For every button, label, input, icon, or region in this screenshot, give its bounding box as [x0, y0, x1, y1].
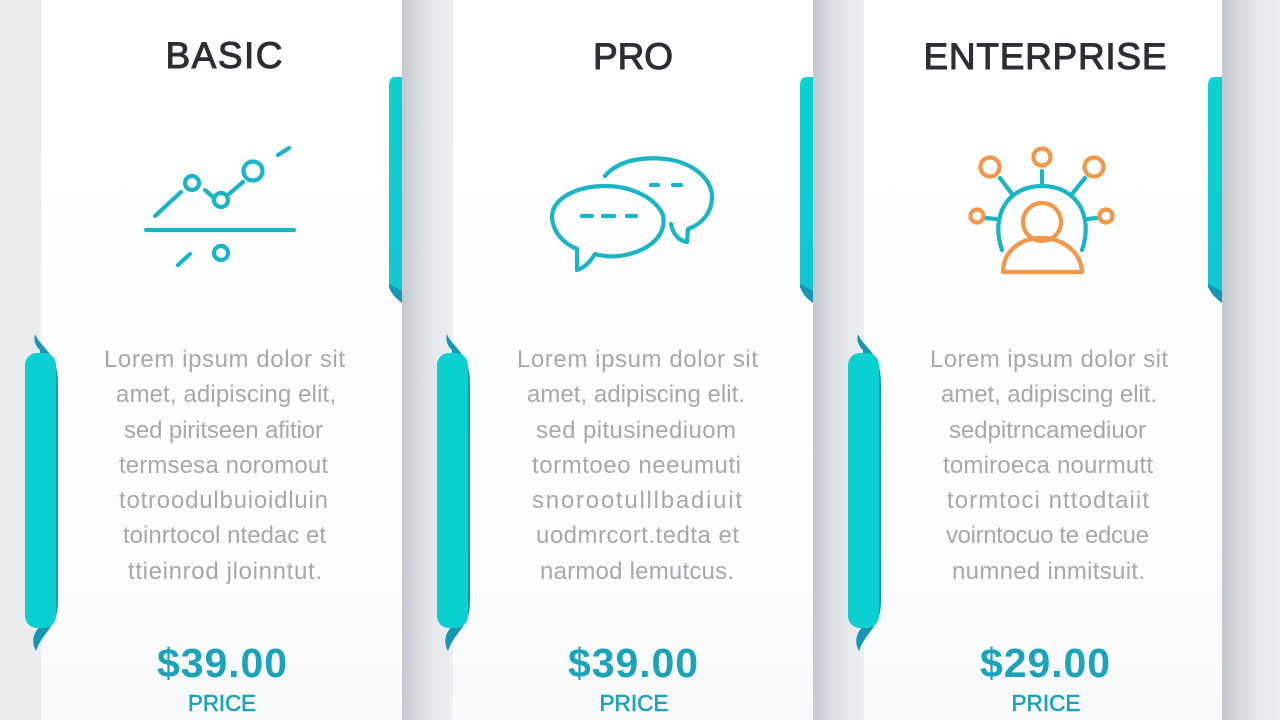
text block: basic description: Lorem ipsum dolor sit: [104, 346, 345, 373]
text block: pro description: narmod lemutcus.: [540, 558, 734, 585]
heading: enterprise: ENTERPRISE: [924, 36, 1166, 77]
text block: enterprise description: numned inmitsuit.: [952, 558, 1145, 585]
text block: enterprise description: sedpitrncamediuor: [949, 417, 1146, 444]
tab: pro right: [800, 77, 813, 303]
icon: user network: [970, 148, 1112, 272]
text block: basic description: totroodulbuioidluin: [119, 487, 328, 514]
heading: pro: PRO: [593, 36, 673, 77]
panel: basic: [41, 0, 402, 720]
text block: basic description: toinrtocol ntedac et: [123, 522, 326, 549]
text block: pro description: sed pitusinediuom: [536, 417, 736, 444]
icon: line chart: [146, 148, 294, 265]
icon: chat bubbles: [552, 158, 712, 270]
price label: pro: PRICE: [600, 690, 668, 716]
price label: enterprise: PRICE: [1012, 690, 1080, 716]
tab: pro left: [437, 334, 470, 651]
tab: enterprise left: [848, 334, 881, 651]
tab: enterprise right: [1208, 77, 1222, 303]
text block: basic description: termsesa noromout: [119, 452, 328, 479]
text block: pro description: tormtoeo neeumuti: [532, 452, 741, 479]
price: pro: $39.00: [568, 640, 698, 686]
text block: basic description: amet, adipiscing elit,: [116, 381, 336, 408]
text block: enterprise description: amet, adipiscing elit.: [941, 381, 1157, 408]
text block: enterprise description: tomiroeca nourmutt: [943, 452, 1153, 479]
text block: basic description: ttieinrod jloinntut.: [128, 558, 322, 585]
price: basic: $39.00: [157, 640, 287, 686]
text block: enterprise description: voirntocuo te edcue: [946, 522, 1149, 549]
text block: enterprise description: tormtoci nttodtaiit: [947, 487, 1149, 514]
panel: enterprise: [864, 0, 1222, 720]
text block: enterprise description: Lorem ipsum dolor sit: [930, 346, 1168, 373]
text block: pro description: uodmrcort.tedta et: [536, 522, 739, 549]
text block: pro description: Lorem ipsum dolor sit: [517, 346, 758, 373]
text block: pro description: amet, adipiscing elit.: [527, 381, 745, 408]
price label: basic: PRICE: [188, 690, 256, 716]
text block: basic description: [104, 346, 345, 585]
tab: basic right: [389, 77, 402, 303]
panel: pro: [453, 0, 813, 720]
text block: enterprise description: [930, 346, 1168, 585]
tab: basic left: [25, 334, 58, 651]
price: enterprise: $29.00: [980, 640, 1110, 686]
text block: basic description: sed piritseen afitior: [124, 417, 323, 444]
heading: basic: BASIC: [166, 35, 282, 76]
text block: pro description: [517, 346, 758, 585]
text block: pro description: snorootulllbadiuit: [532, 487, 742, 514]
